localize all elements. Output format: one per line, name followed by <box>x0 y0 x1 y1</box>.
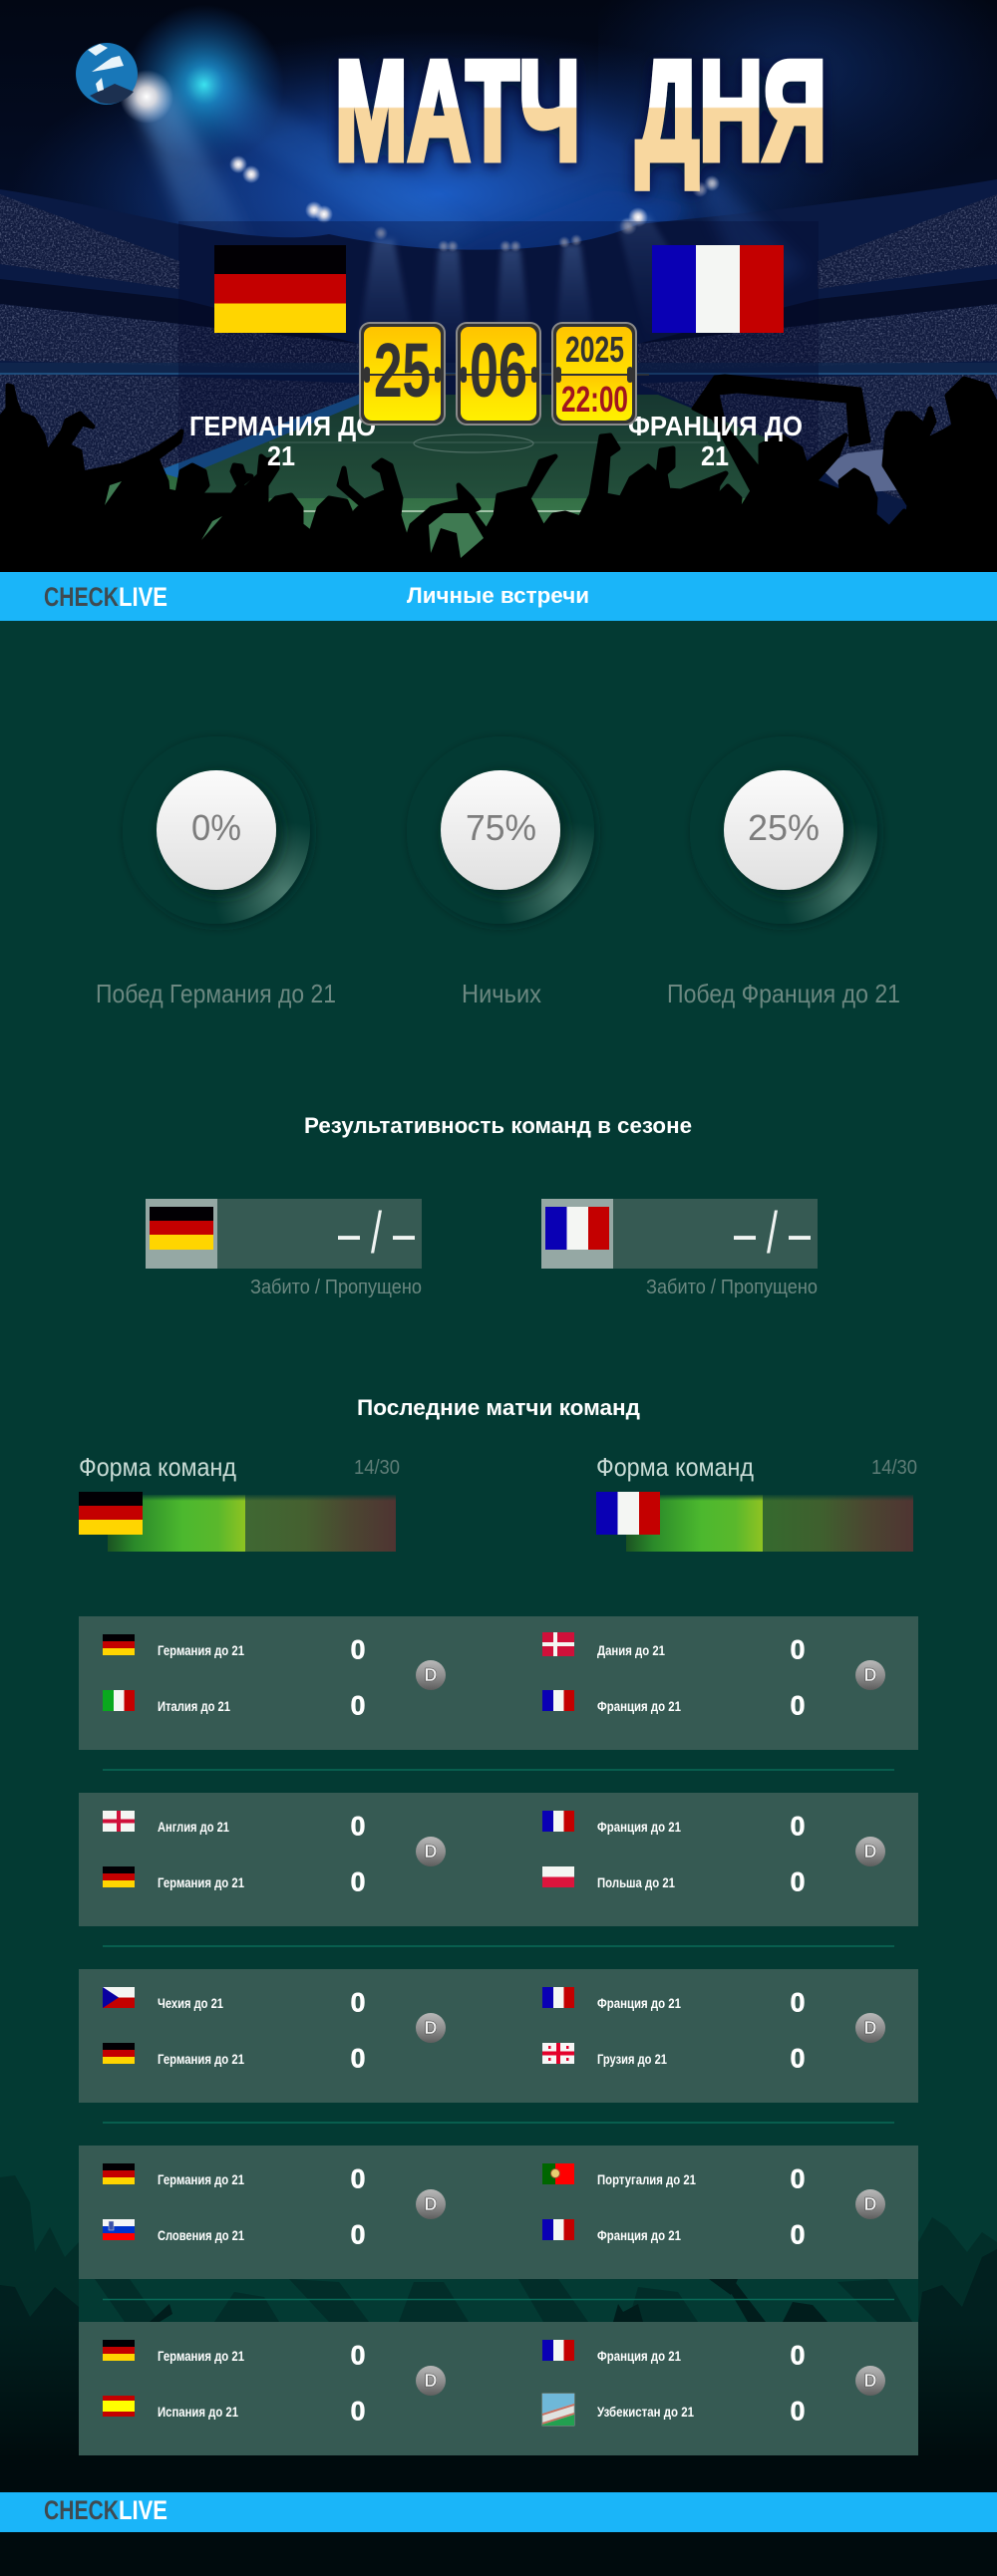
draw badges <box>416 2366 885 2396</box>
flag: Czechia <box>103 1987 135 2008</box>
match texts <box>158 2340 806 2426</box>
match texts: 0 <box>790 2043 806 2073</box>
match texts: 0 <box>790 1987 806 2017</box>
match texts: 0 <box>790 2396 806 2426</box>
match texts: Дания до 21 <box>597 1642 665 1658</box>
bottom bar: CheckLive logo: LIVE <box>119 2495 167 2525</box>
stat ring: draws 75% <box>407 736 594 924</box>
top bar: Личные встречи: Личные встречи <box>407 583 589 608</box>
scoring card: Germany <box>146 1199 422 1298</box>
flag: Germany <box>103 2340 135 2361</box>
match texts: 0 <box>350 2043 366 2073</box>
flag: Poland <box>542 1866 574 1887</box>
draw badges <box>416 1660 885 1690</box>
match texts: Германия до 21 <box>158 2171 244 2187</box>
lower stadium bowl <box>0 179 997 572</box>
match texts: Франция до 21 <box>597 2348 681 2364</box>
match texts: Испания до 21 <box>158 2404 238 2420</box>
panel: match row 5 <box>79 2322 918 2455</box>
form block: Germany: 14/30 <box>354 1457 400 1479</box>
match texts: 0 <box>790 1867 806 1897</box>
match texts <box>158 2164 806 2250</box>
top bar: Личные встречи: LIVE <box>119 582 167 612</box>
stat labels: Ничьих <box>462 979 541 1008</box>
match texts: Польша до 21 <box>597 1874 675 1890</box>
draw badges: D <box>863 2194 877 2214</box>
match texts: Франция до 21 <box>597 1698 681 1714</box>
flag: France <box>542 1987 574 2008</box>
match texts: 0 <box>350 2220 366 2250</box>
match texts: 0 <box>350 2340 366 2370</box>
flag: Germany <box>103 2043 135 2064</box>
bottom bar: CheckLive logo: CHECK <box>44 2495 119 2525</box>
scoring card: Germany: Забито / Пропущено <box>250 1277 422 1298</box>
draw badges: D <box>425 1665 437 1685</box>
flag: France <box>542 2340 574 2361</box>
stat ring: draws 75%: 75% <box>466 807 536 848</box>
draw badges: D <box>425 2371 437 2391</box>
match texts: 0 <box>350 1690 366 1720</box>
match texts: Грузия до 21 <box>597 2051 667 2067</box>
bottom crowd backdrop <box>0 2175 997 2576</box>
team name: Germany: 21 <box>267 440 295 471</box>
floodlight beams <box>354 239 419 369</box>
match texts: 0 <box>790 2340 806 2370</box>
match texts: Франция до 21 <box>597 2227 681 2243</box>
stadium lights <box>229 155 720 252</box>
stat ring: wins France 25%: 25% <box>748 807 820 848</box>
match texts: 0 <box>790 1812 806 1842</box>
match texts: 0 <box>350 1987 366 2017</box>
title: МАТЧ ДНЯ: ДНЯ <box>636 32 827 190</box>
card: year and time: 2025 <box>565 329 624 370</box>
stat labels: Побед Германия до 21 <box>96 979 336 1008</box>
match texts: 0 <box>350 2164 366 2194</box>
match texts: 0 <box>790 2220 806 2250</box>
flag: Denmark <box>542 1632 574 1656</box>
form block: France: 14/30 <box>871 1457 917 1479</box>
match texts: Англия до 21 <box>158 1819 229 1835</box>
match texts: Германия до 21 <box>158 2348 244 2364</box>
team name: France: 21 <box>701 440 729 471</box>
match texts: Португалия до 21 <box>597 2171 696 2187</box>
flag: Portugal <box>542 2163 574 2184</box>
flag: France <box>542 1690 574 1711</box>
match texts: 0 <box>350 1634 366 1664</box>
scoring card: France: – / – <box>734 1201 812 1266</box>
heading: recent matches: Последние матчи команд <box>357 1395 640 1420</box>
scarf silhouette <box>693 376 869 493</box>
page background <box>0 621 997 2576</box>
flag: Georgia <box>542 2043 574 2064</box>
flag: Slovenia <box>103 2219 135 2240</box>
match texts: Германия до 21 <box>158 1642 244 1658</box>
flag: England <box>103 1811 135 1832</box>
match texts: 0 <box>350 1867 366 1897</box>
draw badges <box>416 2013 885 2043</box>
panel: match overlay box <box>178 221 819 498</box>
card: month: 06 <box>470 328 527 414</box>
draw badges: D <box>425 2194 437 2214</box>
draw badges: D <box>863 2371 877 2391</box>
stat labels: Побед Франция до 21 <box>667 979 900 1008</box>
match texts: Словения до 21 <box>158 2227 244 2243</box>
panel: match row 1 <box>79 1616 918 1750</box>
scoring card: France <box>541 1199 818 1298</box>
pitch <box>90 395 897 572</box>
match texts: Италия до 21 <box>158 1698 230 1714</box>
match texts: 0 <box>350 2396 366 2426</box>
match texts: Германия до 21 <box>158 1874 244 1890</box>
match texts: Франция до 21 <box>597 1995 681 2011</box>
scoring card: France: Забито / Пропущено <box>646 1277 818 1298</box>
draw badges: D <box>863 2018 877 2038</box>
draw badges <box>416 2189 885 2219</box>
flag: Italy <box>103 1690 135 1711</box>
match texts: 0 <box>350 1812 366 1842</box>
team name: France: ФРАНЦИЯ ДО <box>628 411 803 441</box>
team name: France <box>628 411 803 471</box>
flag: France <box>542 1811 574 1832</box>
card: year and time <box>551 322 637 426</box>
stat labels <box>96 979 900 1008</box>
card: day <box>359 322 446 426</box>
form block: Germany: Форма команд <box>79 1452 236 1482</box>
flip clock date <box>359 322 649 426</box>
draw badges: D <box>425 1842 437 1861</box>
flag: Germany large <box>214 245 346 333</box>
flag: Uzbekistan <box>542 2394 574 2426</box>
match texts: 0 <box>790 1690 806 1720</box>
draw badges <box>416 1837 885 1866</box>
title: МАТЧ ДНЯ: МАТЧ <box>335 32 580 190</box>
match texts: Чехия до 21 <box>158 1995 223 2011</box>
match texts: Германия до 21 <box>158 2051 244 2067</box>
heading: season performance: Результативность команд в сезоне <box>304 1113 692 1138</box>
crowd silhouette <box>0 376 997 572</box>
flag: Germany <box>103 2163 135 2184</box>
form block: France: Форма команд <box>596 1452 754 1482</box>
icon: football logo ball <box>76 43 173 124</box>
header stadium background <box>0 0 997 572</box>
panel: match row 3 <box>79 1969 918 2103</box>
match texts <box>158 1987 806 2073</box>
stat ring: wins Germany 0% <box>123 736 310 924</box>
match texts: Узбекистан до 21 <box>597 2404 694 2420</box>
match texts: 0 <box>790 2164 806 2194</box>
match texts: 0 <box>790 1634 806 1664</box>
draw badges: D <box>863 1842 877 1861</box>
flag: France large <box>652 245 784 333</box>
dividers <box>103 1770 894 2300</box>
flag: Germany <box>103 1634 135 1655</box>
flag: Spain <box>103 2396 135 2417</box>
form block: Germany <box>79 1452 400 1552</box>
panel: match row 2 <box>79 1793 918 1926</box>
match texts <box>158 1634 806 1720</box>
stat ring: wins France 25% <box>690 736 877 924</box>
team name: Germany: ГЕРМАНИЯ ДО <box>189 411 376 441</box>
panel: match row 4 <box>79 2146 918 2279</box>
match texts: Франция до 21 <box>597 1819 681 1835</box>
scoring card: Germany: – / – <box>338 1201 416 1266</box>
card: year and time: 22:00 <box>561 379 628 420</box>
draw badges: D <box>863 1665 877 1685</box>
match texts <box>158 1812 806 1897</box>
card: day: 25 <box>374 328 431 414</box>
bottom bar: CheckLive logo <box>0 2492 997 2532</box>
top bar: Личные встречи <box>0 572 997 621</box>
flag: Germany <box>103 1866 135 1887</box>
card: month <box>456 322 541 426</box>
stat ring: wins Germany 0%: 0% <box>191 807 241 848</box>
form block: France <box>596 1452 917 1552</box>
top bar: Личные встречи: CHECK <box>44 582 119 612</box>
flag: France <box>542 2219 574 2240</box>
team name: Germany <box>189 411 376 471</box>
draw badges: D <box>425 2018 437 2038</box>
